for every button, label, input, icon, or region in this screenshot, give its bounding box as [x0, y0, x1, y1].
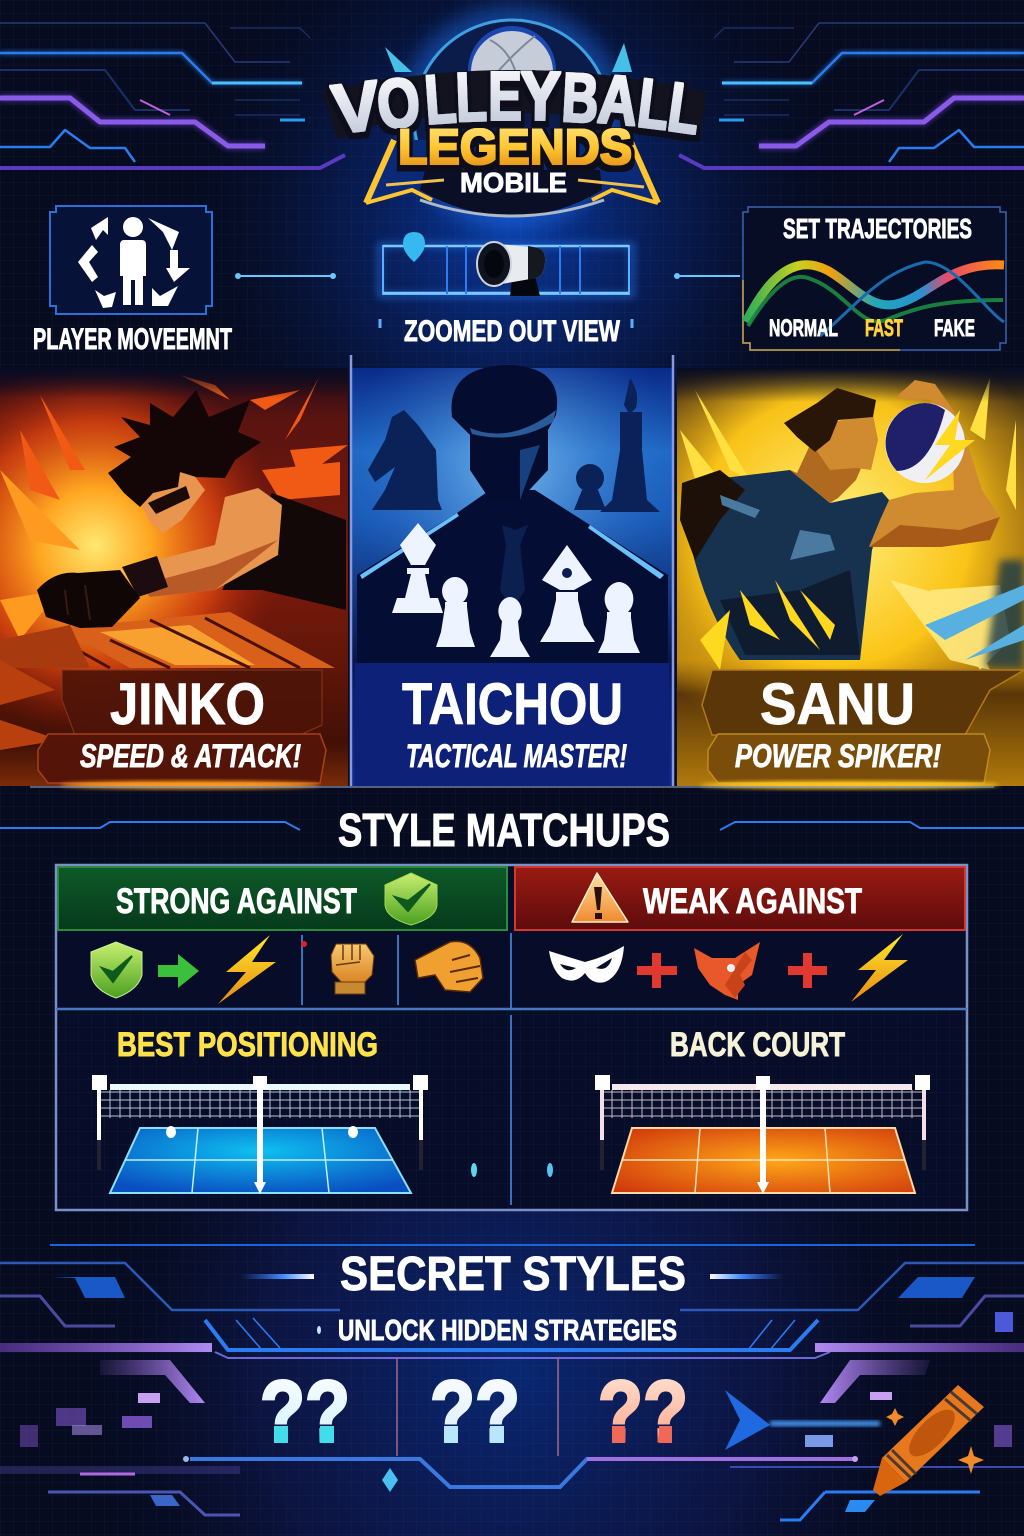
header: weak against: WEAK AGAINST [643, 882, 862, 921]
chart: orange court [547, 1075, 930, 1194]
name band [355, 663, 669, 786]
decorative tech blocks: left [0, 1360, 240, 1515]
bottom glow [700, 781, 1000, 789]
panel: zoomed out view [380, 232, 632, 348]
logo word: VOLLEYBALL: A [595, 60, 641, 141]
logo: Volleyball Legends Mobile [322, 6, 706, 230]
tagline: TACTICAL MASTER! [406, 738, 627, 774]
header: strong against: STRONG AGAINST [116, 882, 357, 921]
decorative tech blocks: right [725, 1312, 1024, 1520]
tagline: SPEED & ATTACK! [80, 738, 301, 774]
connector: right [674, 273, 740, 279]
logo word: VOLLEYBALL: Y [519, 56, 562, 135]
logo word: VOLLEYBALL: L [422, 59, 458, 139]
name: SANU [760, 672, 915, 737]
frame [743, 207, 1006, 350]
panel: player movement [33, 206, 232, 356]
logo word: VOLLEYBALL: L [634, 63, 674, 145]
icon: green arrow [158, 954, 199, 988]
heading: back court: BACK COURT [670, 1026, 845, 1064]
circuit frame: secret styles left [0, 1245, 975, 1358]
panel background [677, 368, 1024, 786]
trajectory curves [746, 262, 1004, 336]
row: strong against icons [91, 935, 483, 1005]
panel: set trajectories: FAKE [934, 315, 975, 342]
name band glow [400, 660, 630, 664]
curve labels: NORMAL [769, 315, 838, 342]
tagline: POWER SPIKER! [735, 738, 941, 774]
panel: set trajectories: FAST [865, 315, 903, 342]
icon: punching fist [415, 941, 483, 992]
icon: camera [477, 242, 545, 296]
icon: red plus [637, 953, 677, 988]
logo word: VOLLEYBALL: B [560, 58, 600, 138]
name plate [62, 670, 322, 735]
tagline plate [38, 734, 326, 783]
icon: check shield [385, 873, 437, 925]
character: Taichou silhouette [357, 365, 668, 663]
heading: Style Matchups [0, 804, 1024, 856]
label: PLAYER MOVEEMNT [33, 323, 232, 356]
chess pieces: white foreground [392, 523, 640, 657]
icon: lightning bolt [218, 935, 276, 1004]
label: ZOOMED OUT VIEW [404, 315, 621, 348]
tagline plate [708, 734, 990, 783]
circuit lines: top right [679, 23, 1024, 168]
slot 2: ?? [430, 1364, 520, 1460]
panel: Taichou [351, 355, 673, 786]
icon: white mask [549, 946, 624, 983]
icon: warning triangle [572, 873, 628, 922]
icon: red plus [788, 953, 827, 988]
logo emblem [322, 6, 706, 230]
heading: best positioning: BEST POSITIONING [117, 1026, 378, 1064]
icon: check shield [91, 942, 142, 998]
circuit frame: secret styles right [500, 1263, 1024, 1352]
panel background [0, 368, 348, 786]
slot 3: ?? [598, 1364, 688, 1460]
chart: blue court [92, 1075, 477, 1194]
name plate [702, 670, 1024, 735]
logo word: MOBILE: MOBILE [460, 167, 567, 198]
logo word: LEGENDS: LEGENDS [398, 119, 632, 175]
panel background [351, 355, 673, 786]
panel: matchups table [56, 865, 967, 1210]
panel: Sanu [677, 368, 1024, 789]
logo word: VOLLEYBALL: E [488, 57, 522, 135]
logo word: VOLLEYBALL [328, 56, 705, 149]
table frame [56, 865, 967, 1210]
logo word: VOLLEYBALL: O [373, 63, 424, 145]
icon frame [50, 206, 212, 314]
chess pieces: dark backdrop [368, 378, 660, 512]
logo word: VOLLEYBALL: L [664, 67, 705, 149]
icon: fox mask [694, 942, 760, 1000]
slot 1: ?? [260, 1364, 350, 1460]
panel: secret style slots [183, 1357, 858, 1492]
bottom glow [60, 781, 320, 789]
name: TAICHOU [402, 672, 623, 737]
header: strong against [58, 867, 507, 930]
character: Sanu [680, 380, 1000, 670]
logo word: VOLLEYBALL: L [454, 57, 488, 136]
panel: set trajectories [743, 207, 1006, 350]
icon: map pin [403, 232, 425, 262]
name: JINKO [110, 672, 265, 737]
panel: Jinko [0, 368, 348, 789]
character: Jinko [37, 390, 346, 628]
icon: lightning bolt [851, 934, 908, 1002]
connector: left [235, 273, 336, 279]
court strip [380, 245, 632, 295]
subheading: UNLOCK HIDDEN STRATEGIES [338, 1315, 677, 1347]
icon: raised fist [331, 944, 374, 994]
icon: orange crayon [873, 1385, 984, 1496]
slot frame [183, 1357, 858, 1487]
row: weak against icons [549, 934, 908, 1002]
logo word: VOLLEYBALL: V [328, 65, 384, 149]
icon: player with direction arrows [78, 217, 190, 308]
small diamond [382, 1468, 398, 1492]
circuit lines: top left [0, 23, 345, 168]
heading: Secret Styles: SECRET STYLES [340, 1248, 686, 1301]
header: weak against [515, 867, 965, 930]
heading: Style Matchups: STYLE MATCHUPS [338, 804, 670, 856]
